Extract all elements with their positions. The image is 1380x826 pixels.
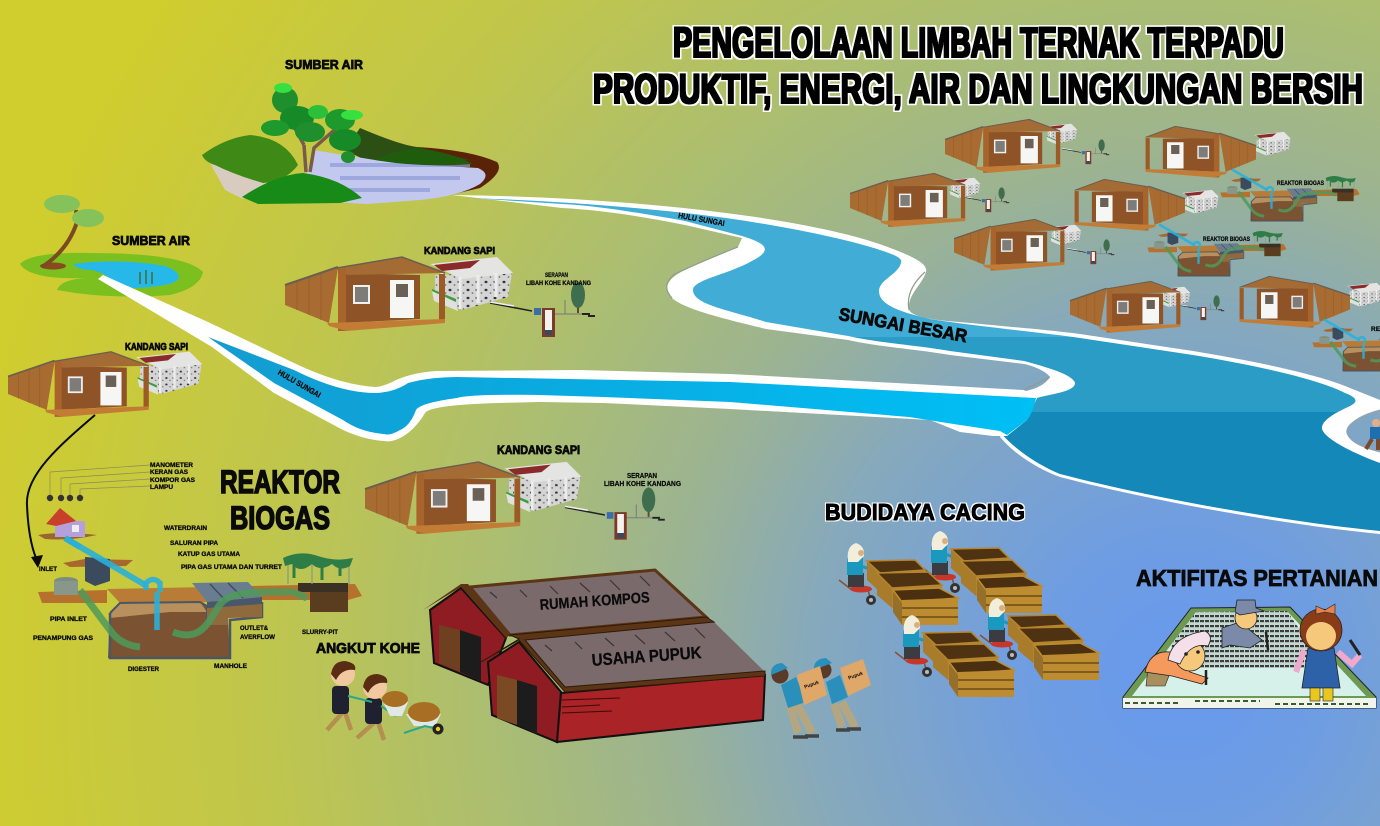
- label serapan bawah: [604, 473, 682, 488]
- label serapan bawah: SERAPAN: [627, 473, 657, 480]
- sumber air: kolam kecil: [20, 195, 203, 297]
- label serapan utama: LIBAH KOHE KANDANG: [526, 280, 591, 287]
- sumber air: danau besar: [202, 83, 499, 204]
- kandang sapi utama: [285, 257, 595, 337]
- panah kandang ke reaktor: [27, 415, 95, 568]
- rumah kompos dan usaha pupuk: USAHA PUPUK: [591, 643, 703, 670]
- label sumber air atas: SUMBER AIR: [285, 57, 364, 72]
- kandang sapi bawah: [365, 462, 665, 540]
- judul: [593, 19, 1363, 112]
- kandang sapi: kelompok kanan atas: [850, 119, 1380, 332]
- orang di tepi sungai: [1366, 419, 1380, 450]
- label kandang sapi kiri: KANDANG SAPI: [125, 342, 188, 353]
- label reaktor biogas: REAKTOR: [220, 464, 340, 500]
- label sungai besar: SUNGAI BESAR: [837, 304, 969, 346]
- diagram reaktor biogas: MANHOLE: [214, 663, 248, 670]
- diagram reaktor biogas: AVERFLOW: [240, 634, 276, 641]
- budidaya cacing: [839, 531, 1099, 697]
- diagram reaktor biogas: KERAN GAS: [150, 469, 189, 476]
- kandang sapi kiri: [8, 352, 202, 417]
- reaktor biogas mini: REAKTOR BIOGAS: [1277, 180, 1325, 187]
- diagram reaktor biogas: WATERDRAIN: [164, 525, 207, 532]
- diagram reaktor biogas: PIPA INLET: [50, 616, 87, 623]
- diagram reaktor biogas: KOMPOR GAS: [150, 477, 196, 484]
- pekerja angkut pupuk: [771, 658, 871, 737]
- label reaktor biogas: [220, 464, 340, 536]
- label serapan utama: [526, 272, 591, 287]
- river: sungai besar: [440, 190, 1380, 542]
- reaktor biogas mini: [1147, 169, 1380, 371]
- pekerja angkut pupuk: Pupuk: [847, 671, 864, 681]
- label kandang sapi bawah: KANDANG SAPI: [497, 445, 580, 457]
- label kandang sapi utama: KANDANG SAPI: [424, 245, 495, 257]
- pekerja angkut pupuk: Pupuk: [803, 680, 820, 690]
- label sumber air kiri: SUMBER AIR: [112, 233, 191, 248]
- label budidaya cacing: BUDIDAYA CACING: [825, 499, 1025, 525]
- diagram reaktor biogas: SLURRY-PIT: [302, 629, 338, 636]
- diagram reaktor biogas: MANOMETER: [150, 462, 193, 469]
- rumah kompos dan usaha pupuk: [423, 570, 765, 742]
- diagram reaktor biogas: SALURAN PIPA: [170, 540, 218, 547]
- diagram reaktor biogas: INLET: [39, 566, 57, 573]
- reaktor biogas mini: REAKTOR BIOGAS: [1203, 236, 1251, 243]
- label hulu sungai bawah: HULU SUNGAI: [276, 368, 322, 400]
- diagram reaktor biogas: DIGESTER: [128, 666, 159, 673]
- diagram reaktor biogas: LAMPU: [150, 484, 173, 491]
- diagram reaktor biogas: KATUP GAS UTAMA: [178, 551, 240, 558]
- pekerja angkut kohe: [327, 661, 444, 740]
- diagram reaktor biogas: OUTLET&: [240, 625, 268, 632]
- diagram reaktor biogas: [33, 462, 362, 673]
- label serapan utama: SERAPAN: [545, 272, 568, 279]
- diagram reaktor biogas: PIPA GAS UTAMA DAN TURRET: [181, 564, 282, 571]
- rumah kompos dan usaha pupuk: RUMAH KOMPOS: [539, 589, 650, 614]
- aktifitas pertanian: [1123, 600, 1376, 708]
- label hulu sungai atas: HULU SUNGAI: [678, 211, 725, 228]
- label serapan bawah: LIBAH KOHE KANDANG: [604, 481, 682, 488]
- label angkut kohe: ANGKUT KOHE: [316, 640, 420, 657]
- river: anak sungai: [98, 275, 1037, 441]
- label reaktor biogas: BIOGAS: [230, 500, 330, 536]
- diagram reaktor biogas: PENAMPUNG GAS: [33, 635, 94, 642]
